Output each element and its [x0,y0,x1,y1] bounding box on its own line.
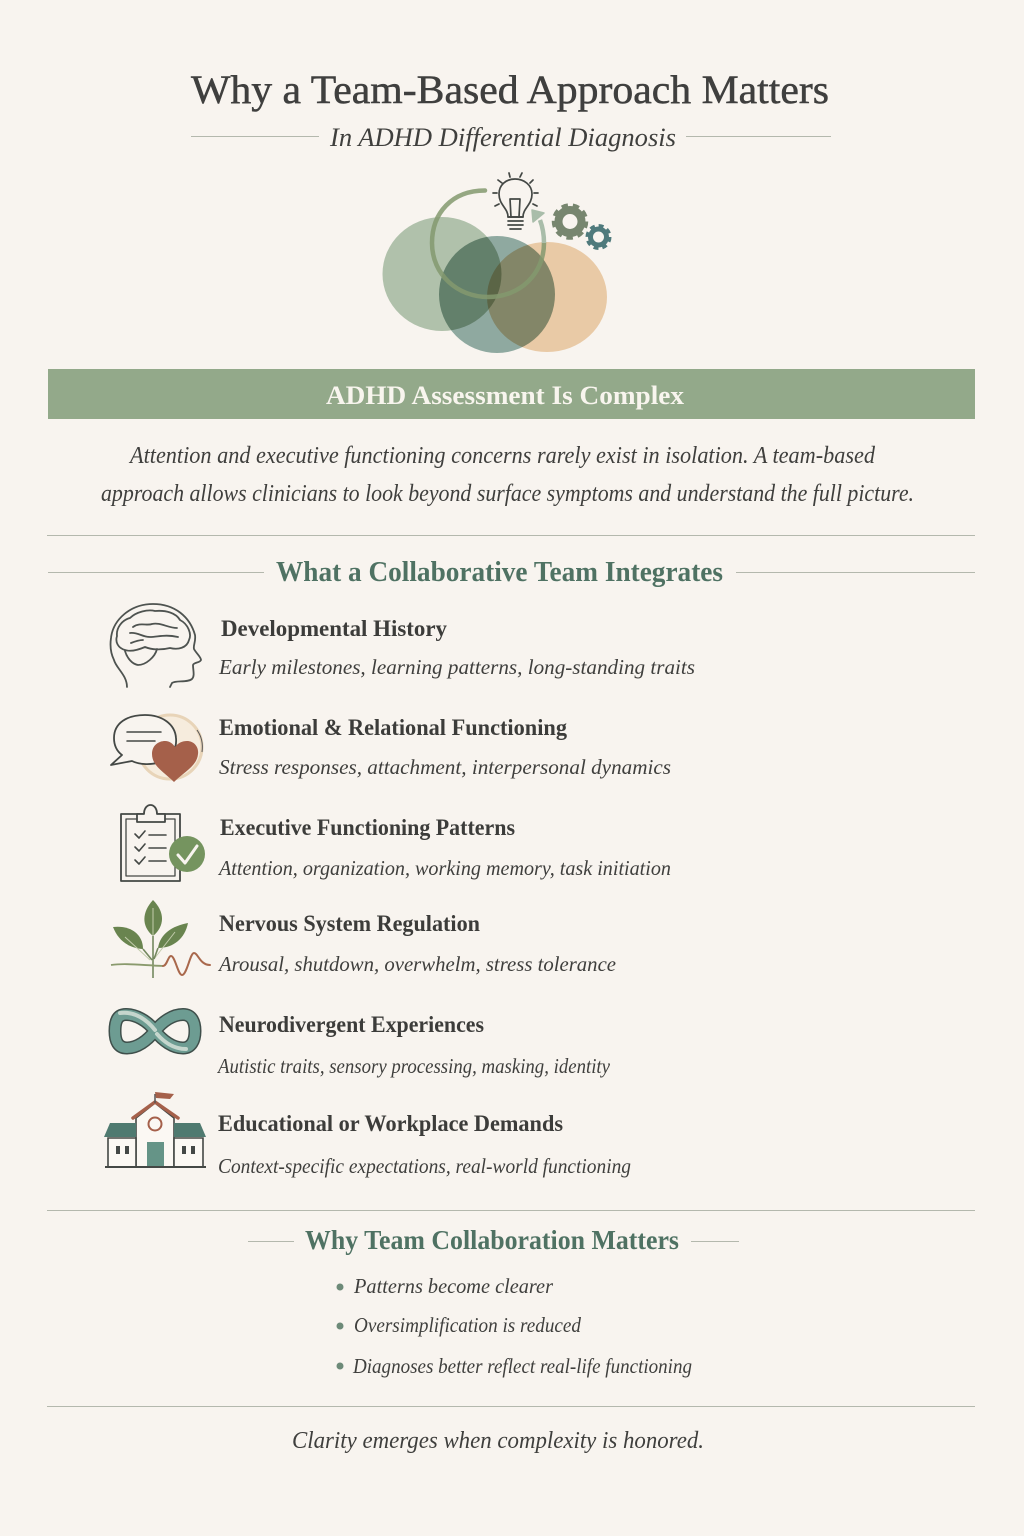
icon: large gear [554,205,586,238]
item: educational or workplace demands: Context-specific expectations, real-world functioning [218,1154,631,1178]
item: educational or workplace demands [104,1092,631,1178]
banner: ADHD Assessment Is Complex [326,381,684,410]
subtitle: In ADHD Differential Diagnosis [329,123,676,152]
overlapping circles [382,217,607,353]
item: emotional and relational functioning: Emotional & Relational Functioning [219,715,567,740]
icon: infinity loop [115,1013,195,1049]
item: nervous system regulation [111,900,616,978]
bullet list: Diagnoses better reflect real-life functioning [352,1354,692,1378]
item: executive functioning patterns: Executive Functioning Patterns [220,815,515,840]
item: neurodivergent experiences: Neurodivergent Experiences [219,1012,484,1037]
icon: speech bubble and heart [111,715,202,782]
bullet list: Oversimplification is reduced [354,1313,581,1337]
item: neurodivergent experiences: Autistic traits, sensory processing, masking, identity [216,1054,610,1078]
item: neurodivergent experiences [115,1012,610,1078]
item: developmental history: Developmental History [221,616,447,641]
icon: plant with wave [111,900,210,978]
icon: brain in head [110,604,201,687]
item: developmental history: Early milestones, learning patterns, long-standing traits [218,655,695,679]
item: emotional and relational functioning: Stress responses, attachment, interpersonal dynamics [219,755,671,779]
item: developmental history [110,604,695,687]
section heading: why collaboration matters: Why Team Collaboration Matters [305,1225,679,1255]
closing statement: Clarity emerges when complexity is honored. [292,1428,704,1454]
bullet list: Patterns become clearer [353,1274,554,1298]
item: nervous system regulation: Arousal, shutdown, overwhelm, stress tolerance [217,952,616,976]
item: emotional and relational functioning [111,715,671,782]
icon: lightbulb [493,173,538,229]
intro paragraph [101,443,914,507]
section heading: team integrates: What a Collaborative Team Integrates [276,557,723,588]
hero illustration: overlapping circles, lightbulb and gears [382,173,610,353]
banner [48,369,975,419]
item: nervous system regulation: Nervous System Regulation [219,911,480,936]
bullet list [336,1274,692,1378]
icon: schoolhouse [104,1092,206,1167]
circular arrow [432,190,544,297]
icon: clipboard with check badge [121,805,205,881]
intro paragraph: approach allows clinicians to look beyond surface symptoms and understand the full picture. [101,481,914,507]
item: executive functioning patterns [121,805,671,881]
item: executive functioning patterns: Attention, organization, working memory, task initiation [217,856,671,880]
title: Why a Team-Based Approach Matters [191,67,829,112]
item: educational or workplace demands: Educational or Workplace Demands [218,1111,563,1136]
intro paragraph: Attention and executive functioning concerns rarely exist in isolation. A team-based [128,443,876,469]
icon: small gear [587,226,610,248]
